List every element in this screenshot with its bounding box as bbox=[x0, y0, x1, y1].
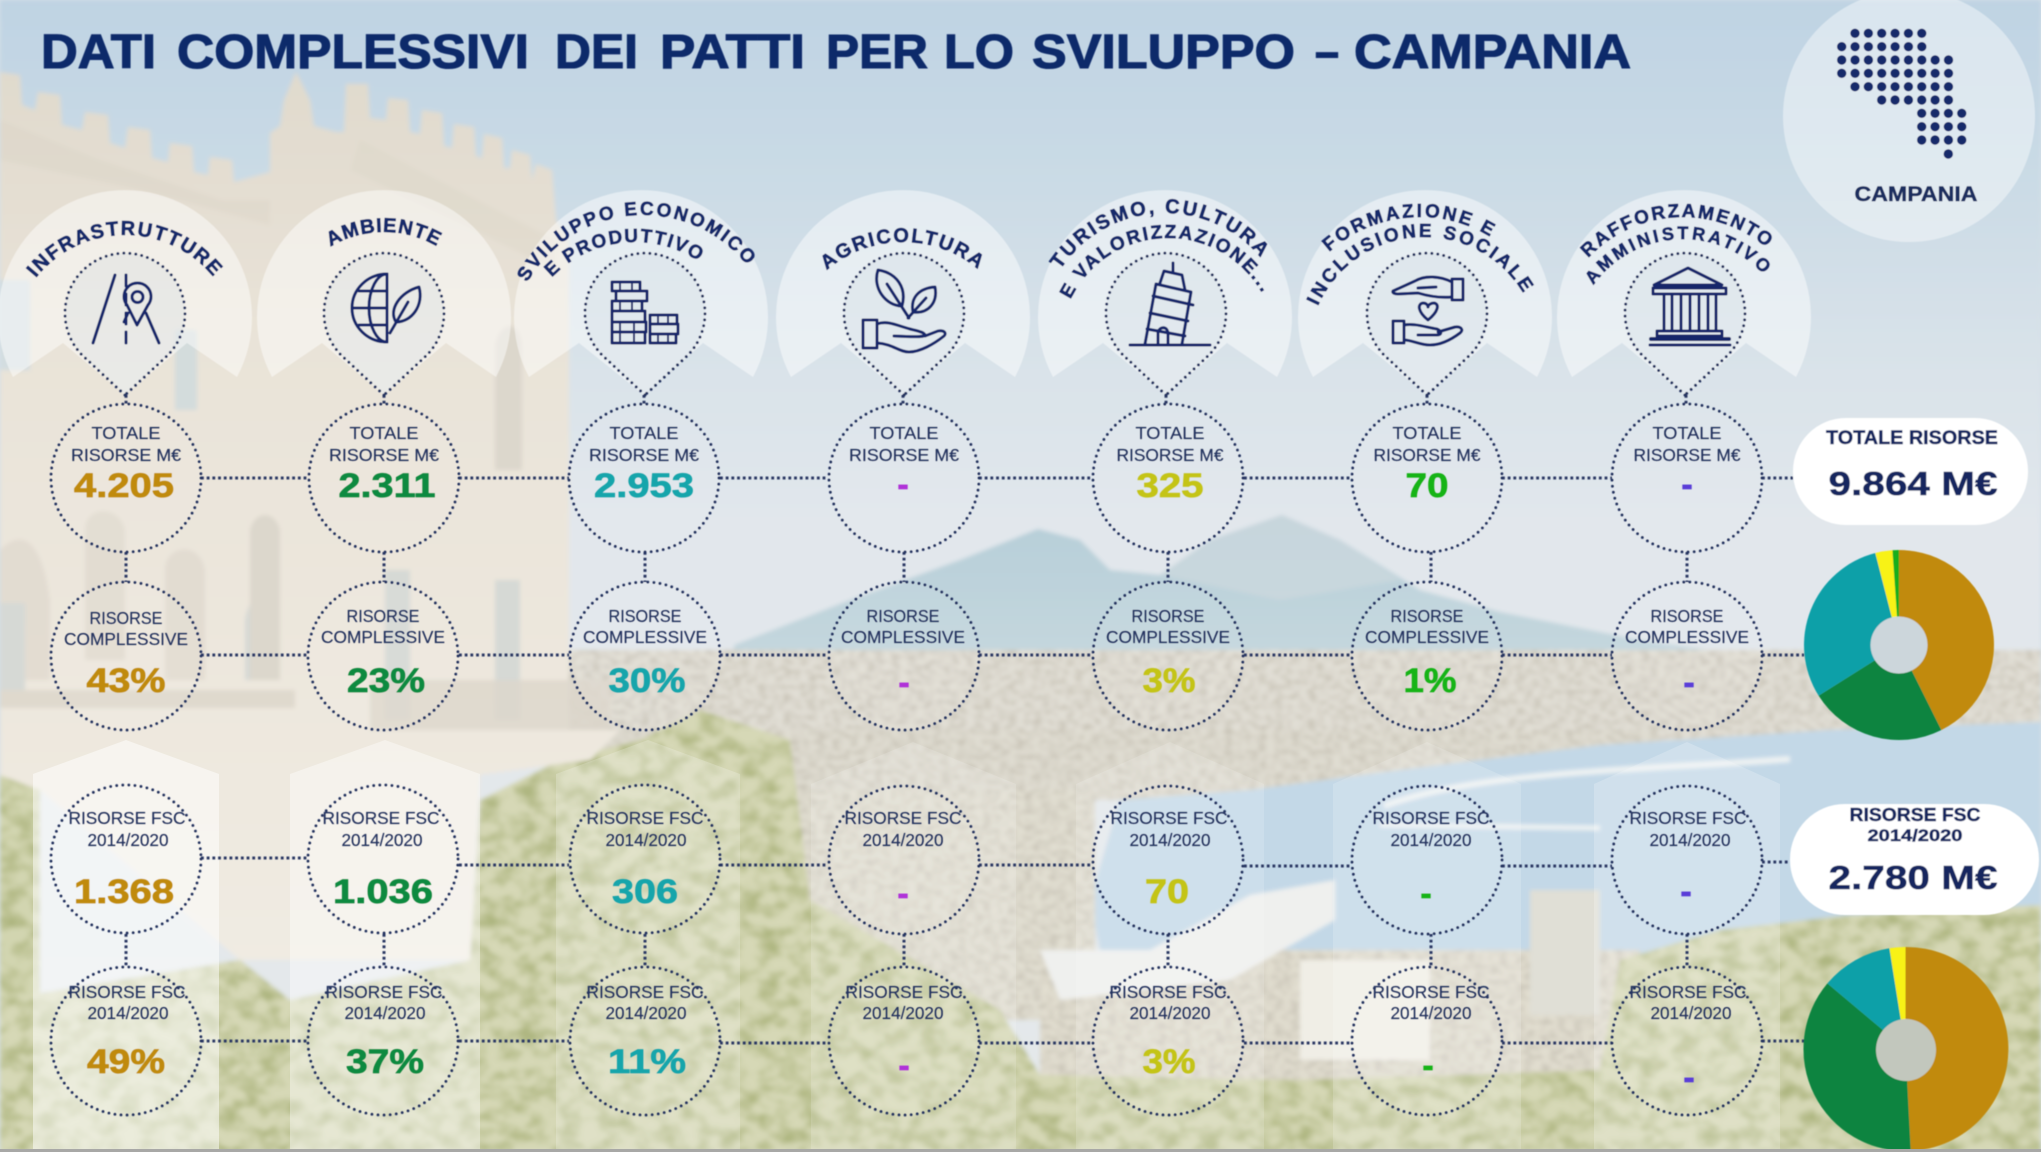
metric: Agricoltura FSC percentuale: - bbox=[898, 1047, 910, 1085]
metric: Agricoltura FSC: - bbox=[897, 875, 909, 913]
metric: Turismo totale: TOTALE bbox=[1136, 423, 1204, 443]
metric: Ambiente totale: RISORSE M€ bbox=[329, 445, 439, 465]
metric: Agricoltura totale: RISORSE M€ bbox=[849, 445, 959, 465]
metric: Infrastrutture FSC: 2014/2020 bbox=[88, 830, 169, 850]
metric: Infrastrutture FSC: RISORSE FSC bbox=[68, 808, 186, 828]
metric: Turismo FSC percentuale: 2014/2020 bbox=[1130, 1003, 1211, 1023]
metric: Ambiente FSC percentuale: 37% bbox=[346, 1043, 424, 1081]
metric: Rafforzamento FSC bbox=[1612, 786, 1762, 934]
title bbox=[41, 26, 1631, 79]
metric: Sviluppo totale bbox=[569, 404, 719, 552]
panel: Sviluppo economico e produttivo header: E PRODUTTIVO bbox=[542, 228, 704, 278]
metric: Agricoltura FSC: 2014/2020 bbox=[862, 830, 944, 850]
metric: Ambiente FSC: RISORSE FSC bbox=[322, 808, 440, 828]
metric: Ambiente totale: TOTALE bbox=[350, 423, 418, 443]
metric: Ambiente FSC percentuale: RISORSE FSC bbox=[326, 982, 442, 1002]
metric: Infrastrutture FSC percentuale: 49% bbox=[87, 1043, 165, 1081]
metric: Agricoltura totale: TOTALE bbox=[870, 423, 938, 443]
metric: Ambiente percentuale bbox=[308, 582, 458, 730]
metric: Infrastrutture FSC bbox=[51, 785, 201, 933]
metric: Formazione FSC: RISORSE FSC bbox=[1372, 808, 1490, 828]
icon: hands and heart bbox=[1393, 277, 1463, 345]
metric: Sviluppo FSC percentuale: 11% bbox=[608, 1043, 686, 1081]
metric: Agricoltura FSC percentuale bbox=[829, 967, 979, 1115]
title: LO bbox=[944, 26, 1014, 79]
metric: Ambiente totale: 2.311 bbox=[338, 467, 436, 505]
title: DEI bbox=[555, 26, 638, 79]
metric: Formazione totale: TOTALE bbox=[1392, 423, 1462, 443]
metric: Formazione percentuale: COMPLESSIVE bbox=[1365, 627, 1489, 647]
metric: Sviluppo FSC bbox=[570, 785, 720, 933]
metric: Formazione FSC percentuale: RISORSE FSC bbox=[1372, 982, 1490, 1002]
metric: Formazione percentuale bbox=[1352, 582, 1502, 730]
metric: Infrastrutture FSC percentuale: 2014/2020 bbox=[88, 1003, 169, 1023]
metric: Infrastrutture totale: RISORSE M€ bbox=[71, 445, 181, 465]
heading: RAFFORZAMENTO bbox=[1579, 203, 1772, 258]
metric: Infrastrutture FSC percentuale: RISORSE FSC bbox=[68, 982, 186, 1002]
metric: Ambiente FSC percentuale: 2014/2020 bbox=[344, 1003, 426, 1023]
metric: Formazione FSC percentuale: - bbox=[1422, 1047, 1434, 1085]
metric: Turismo FSC: 2014/2020 bbox=[1130, 830, 1211, 850]
panel: Sviluppo economico e produttivo header bbox=[514, 190, 768, 397]
title: COMPLESSIVI bbox=[177, 26, 529, 79]
heading: SVILUPPO ECONOMICO bbox=[516, 200, 756, 282]
callout: totale risorse bbox=[1793, 418, 2028, 525]
metric: Turismo FSC bbox=[1093, 786, 1243, 934]
title: DATI bbox=[41, 26, 156, 79]
metric: Rafforzamento totale: - bbox=[1681, 466, 1693, 504]
metric: Agricoltura totale bbox=[829, 404, 979, 552]
metric: Turismo percentuale: RISORSE bbox=[1132, 606, 1204, 626]
icon: road and location pin bbox=[93, 275, 159, 343]
metric: Rafforzamento percentuale: - bbox=[1683, 664, 1695, 702]
panel: Infrastrutture header bbox=[0, 190, 252, 397]
metric: Sviluppo totale: TOTALE bbox=[610, 423, 678, 443]
region badge: Campania bbox=[1783, 0, 2035, 242]
metric: Agricoltura percentuale: - bbox=[898, 664, 910, 702]
row: totale risorse per settore bbox=[51, 404, 1762, 552]
metric: Ambiente totale bbox=[309, 404, 459, 552]
metric: Ambiente FSC percentuale bbox=[308, 967, 458, 1115]
metric: Infrastrutture percentuale: RISORSE bbox=[90, 608, 162, 628]
donut chart: ripartizione risorse FSC bbox=[1803, 947, 2008, 1151]
metric: Sviluppo FSC percentuale bbox=[570, 967, 720, 1115]
callout: totale risorse: 9.864 M€ bbox=[1828, 465, 1998, 502]
metric: Ambiente FSC bbox=[308, 785, 458, 933]
metric: Formazione percentuale: RISORSE bbox=[1390, 606, 1464, 626]
metric: Formazione totale: RISORSE M€ bbox=[1374, 445, 1481, 465]
panel: Formazione e inclusione sociale header: INCLUSIONE SOCIALE bbox=[1306, 223, 1534, 306]
heading: AGRICOLTURA bbox=[822, 227, 983, 271]
metric: Agricoltura FSC bbox=[829, 786, 979, 934]
metric: Sviluppo percentuale: COMPLESSIVE bbox=[583, 627, 707, 647]
metric: Agricoltura FSC percentuale: 2014/2020 bbox=[862, 1003, 944, 1023]
metric: Formazione FSC percentuale: 2014/2020 bbox=[1390, 1003, 1472, 1023]
metric: Sviluppo totale: 2.953 bbox=[594, 467, 694, 505]
panel: Formazione e inclusione sociale header bbox=[1298, 190, 1552, 396]
metric: Rafforzamento totale bbox=[1612, 404, 1762, 552]
metric: Turismo totale bbox=[1093, 404, 1243, 552]
callout: risorse FSC: 2.780 M€ bbox=[1828, 859, 1998, 896]
metric: Rafforzamento FSC percentuale: 2014/2020 bbox=[1650, 1003, 1732, 1023]
metric: Ambiente percentuale: 23% bbox=[347, 662, 425, 700]
translucent panels behind FSC rows bbox=[33, 740, 1780, 1150]
row: risorse FSC valori bbox=[51, 785, 1762, 934]
metric: Agricoltura FSC percentuale: RISORSE FSC bbox=[846, 982, 962, 1002]
title: – bbox=[1315, 26, 1339, 79]
metric: Formazione totale bbox=[1352, 404, 1502, 552]
icon: hand with leaves bbox=[863, 270, 945, 352]
metric: Rafforzamento FSC percentuale bbox=[1612, 967, 1762, 1115]
title: SVILUPPO bbox=[1032, 26, 1295, 79]
metric: Rafforzamento FSC: RISORSE FSC bbox=[1630, 808, 1746, 828]
metric: Turismo FSC: 70 bbox=[1145, 873, 1189, 911]
metric: Agricoltura percentuale bbox=[829, 582, 979, 730]
panel: Rafforzamento amministrativo header: AMMINISTRATIVO bbox=[1586, 226, 1770, 286]
donut chart: ripartizione totale risorse bbox=[1804, 550, 1994, 740]
metric: Turismo percentuale bbox=[1093, 582, 1243, 730]
title: PATTI bbox=[660, 26, 805, 79]
panel: Ambiente header bbox=[257, 190, 511, 396]
metric: Rafforzamento FSC percentuale: RISORSE FSC bbox=[1630, 982, 1746, 1002]
metric: Turismo totale: RISORSE M€ bbox=[1116, 445, 1224, 465]
panel: Turismo, cultura e valorizzazione header: E VALORIZZAZIONE... bbox=[1058, 224, 1264, 300]
icon: coin stacks bbox=[612, 282, 678, 343]
heading: INFRASTRUTTURE bbox=[25, 220, 224, 278]
heading: AMBIENTE bbox=[328, 217, 443, 248]
metric: Formazione FSC percentuale bbox=[1352, 967, 1502, 1115]
row: risorse complessive percentuali bbox=[51, 582, 1762, 730]
metric: Sviluppo FSC percentuale: 2014/2020 bbox=[606, 1003, 687, 1023]
panel: Agricoltura header bbox=[776, 190, 1030, 397]
metric: Turismo FSC percentuale: 3% bbox=[1142, 1043, 1196, 1081]
metric: Ambiente FSC: 1.036 bbox=[333, 873, 433, 911]
callout: risorse FSC: 2014/2020 bbox=[1868, 826, 1962, 845]
metric: Infrastrutture totale: TOTALE bbox=[92, 423, 160, 443]
callout: risorse FSC bbox=[1790, 804, 2039, 915]
heading: FORMAZIONE E bbox=[1320, 203, 1496, 252]
callout: totale risorse: TOTALE RISORSE bbox=[1826, 428, 1998, 449]
metric: Ambiente percentuale: COMPLESSIVE bbox=[321, 627, 445, 647]
panel: Rafforzamento amministrativo header bbox=[1557, 190, 1811, 397]
metric: Formazione percentuale: 1% bbox=[1404, 662, 1456, 700]
heading: TURISMO, CULTURA bbox=[1048, 198, 1268, 267]
metric: Infrastrutture FSC: 1.368 bbox=[74, 873, 174, 911]
metric: Sviluppo FSC percentuale: RISORSE FSC bbox=[586, 982, 704, 1002]
metric: Rafforzamento FSC percentuale: - bbox=[1683, 1059, 1695, 1097]
icon: dotted map of Campania bbox=[1842, 33, 1962, 154]
metric: Turismo percentuale: COMPLESSIVE bbox=[1106, 627, 1230, 647]
metric: Agricoltura totale: - bbox=[897, 466, 909, 504]
metric: Rafforzamento totale: TOTALE bbox=[1652, 423, 1722, 443]
metric: Infrastrutture totale: 4.205 bbox=[74, 467, 174, 505]
metric: Rafforzamento percentuale: RISORSE bbox=[1650, 606, 1724, 626]
icon: classical temple bbox=[1650, 268, 1730, 345]
metric: Formazione totale: 70 bbox=[1406, 467, 1448, 505]
metric: Sviluppo percentuale bbox=[570, 582, 720, 730]
callout: risorse FSC: RISORSE FSC bbox=[1850, 805, 1980, 825]
metric: Rafforzamento FSC: - bbox=[1680, 873, 1692, 911]
metric: Sviluppo percentuale: 30% bbox=[608, 662, 686, 700]
metric: Infrastrutture FSC percentuale bbox=[51, 967, 201, 1115]
title: PER bbox=[826, 26, 928, 79]
metric: Sviluppo FSC: 306 bbox=[612, 873, 678, 911]
metric: Rafforzamento FSC: 2014/2020 bbox=[1650, 830, 1731, 850]
metric: Turismo FSC: RISORSE FSC bbox=[1110, 808, 1228, 828]
metric: Agricoltura FSC: RISORSE FSC bbox=[844, 808, 962, 828]
metric: Turismo FSC percentuale bbox=[1093, 967, 1243, 1115]
metric: Infrastrutture percentuale: COMPLESSIVE bbox=[64, 629, 188, 649]
metric: Formazione FSC bbox=[1352, 786, 1502, 934]
horizontal connectors bbox=[201, 478, 1804, 1043]
icon: leaning tower bbox=[1130, 263, 1210, 345]
metric: Formazione FSC: 2014/2020 bbox=[1390, 830, 1472, 850]
metric: Rafforzamento totale: RISORSE M€ bbox=[1634, 445, 1741, 465]
metric: Sviluppo FSC: 2014/2020 bbox=[606, 830, 687, 850]
metric: Turismo FSC percentuale: RISORSE FSC bbox=[1110, 982, 1226, 1002]
metric: Rafforzamento percentuale bbox=[1612, 582, 1762, 730]
metric: Agricoltura percentuale: COMPLESSIVE bbox=[841, 627, 965, 647]
metric: Ambiente FSC: 2014/2020 bbox=[342, 830, 423, 850]
metric: Sviluppo totale: RISORSE M€ bbox=[589, 445, 699, 465]
metric: Infrastrutture totale bbox=[51, 404, 201, 552]
row: risorse FSC percentuali bbox=[51, 967, 1762, 1115]
vertical connectors bbox=[126, 395, 1687, 967]
metric: Infrastrutture percentuale bbox=[51, 582, 201, 730]
metric: Rafforzamento percentuale: COMPLESSIVE bbox=[1625, 627, 1749, 647]
panel: Turismo, cultura e valorizzazione header bbox=[1038, 190, 1292, 396]
title: CAMPANIA bbox=[1354, 26, 1631, 79]
metric: Formazione FSC: - bbox=[1420, 875, 1432, 913]
metric: Turismo totale: 325 bbox=[1136, 467, 1204, 505]
metric: Ambiente percentuale: RISORSE bbox=[346, 606, 420, 626]
icon: globe and leaf bbox=[352, 274, 420, 342]
metric: Agricoltura percentuale: RISORSE bbox=[866, 606, 940, 626]
metric: Sviluppo percentuale: RISORSE bbox=[608, 606, 682, 626]
metric: Infrastrutture percentuale: 43% bbox=[86, 662, 166, 700]
metric: Turismo percentuale: 3% bbox=[1142, 662, 1196, 700]
region name: CAMPANIA bbox=[1854, 183, 1978, 206]
metric: Sviluppo FSC: RISORSE FSC bbox=[586, 808, 704, 828]
